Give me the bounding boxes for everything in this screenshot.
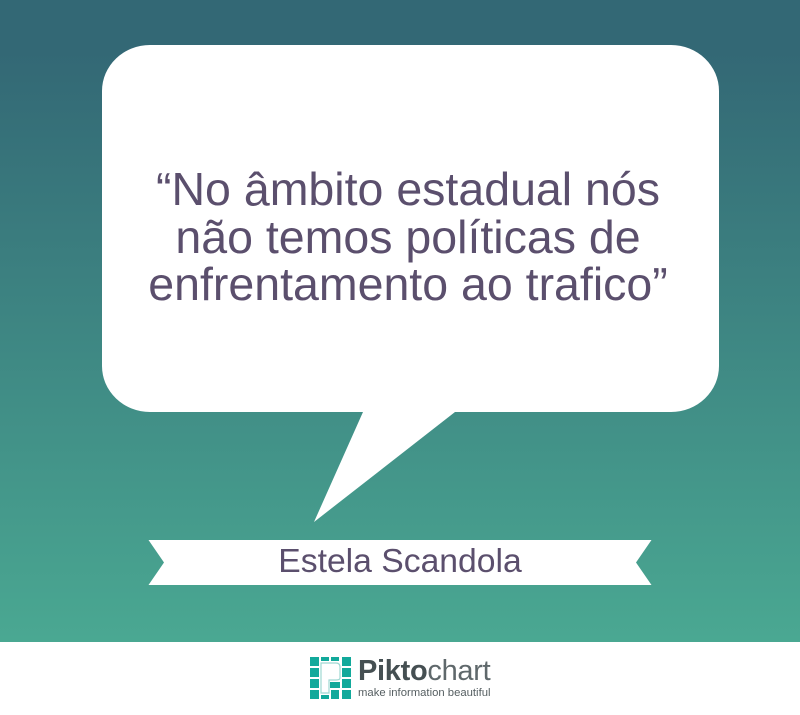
icon: logo mark bbox=[310, 657, 351, 699]
logo wordmark: Piktochart bbox=[358, 655, 490, 687]
logo tagline: make information beautiful bbox=[358, 687, 490, 699]
speaker name: Estela Scandola bbox=[278, 542, 522, 580]
Piktochart logo bbox=[310, 655, 490, 699]
speech bubble bbox=[102, 45, 719, 522]
quote text: não temos políticas de bbox=[175, 210, 641, 262]
quote text: enfrentamento ao trafico” bbox=[148, 258, 668, 310]
quote text bbox=[148, 163, 668, 310]
quote text: “No âmbito estadual nós bbox=[156, 163, 660, 215]
name ribbon banner bbox=[148, 540, 652, 585]
